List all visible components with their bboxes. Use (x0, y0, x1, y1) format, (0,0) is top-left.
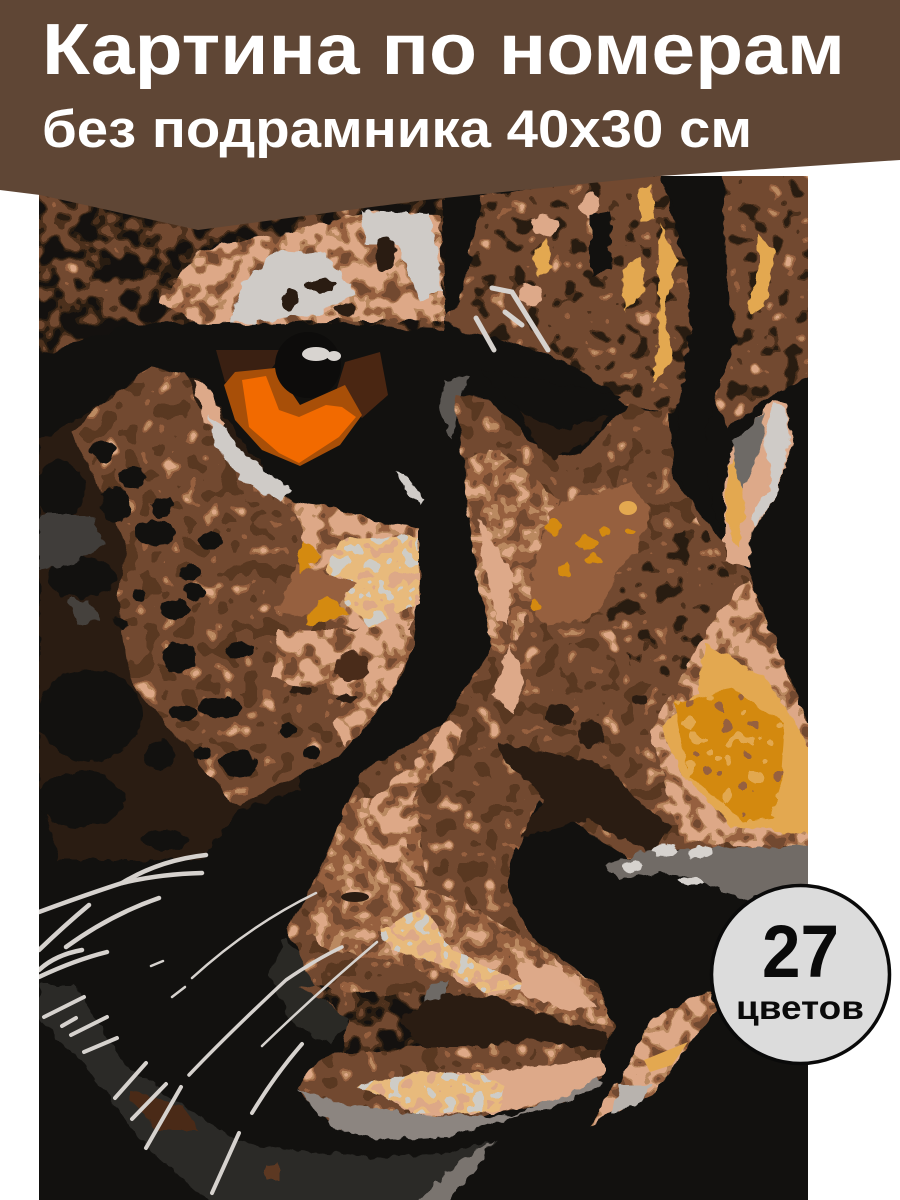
ear-like tuft: pale grey (750, 403, 790, 527)
forehead dark flecks (282, 237, 395, 316)
light gold muzzle patch (661, 643, 830, 837)
bridge gold specks (529, 517, 635, 611)
bridge lower dark flecks (546, 694, 648, 749)
right lip grey (612, 1085, 650, 1112)
peach upper cheek patch (279, 497, 419, 640)
muzzle-side dim grey (270, 940, 350, 1045)
dark shade near nostril (497, 743, 671, 853)
tan bridge area (463, 450, 560, 645)
right forehead fur (444, 170, 695, 412)
far right fur band (714, 176, 808, 428)
cheek dark patch (292, 652, 369, 702)
whisker-pad dark fleck (341, 892, 369, 902)
right lip gold (644, 1042, 688, 1072)
forehead peach flecks (518, 193, 600, 305)
mouth mottled dark (300, 985, 437, 1053)
eye: dark right iris (335, 352, 388, 418)
white forehead marks (476, 288, 548, 350)
header banner (0, 0, 900, 230)
nose top peach strip (360, 720, 463, 860)
speckled muzzle fur (600, 520, 735, 700)
eye: deep orange iris (224, 368, 362, 466)
painting: leopard face (20, 170, 830, 1200)
forehead dark eye spot (590, 212, 612, 275)
title: Картина по номерам (42, 10, 845, 90)
dark brow shade over bridge (614, 395, 621, 400)
ear-like tuft: peach (725, 400, 792, 567)
peach muzzle strip (650, 580, 830, 850)
deep gold muzzle patch (675, 690, 785, 820)
bridge of nose brown base (430, 395, 830, 860)
left cheek dark surround (39, 367, 300, 860)
ear-like tuft: gold strip (726, 455, 745, 550)
dim rust fur (129, 1090, 199, 1130)
grey band above nostril (607, 845, 830, 900)
lower lip light gold (357, 1073, 505, 1113)
white of eye: grey strip (208, 415, 292, 500)
left cheek grey fleck (68, 600, 100, 625)
ear-like tuft: dark grey (733, 413, 765, 488)
pale gold and grey highlight (325, 535, 419, 628)
peach bridge column (493, 643, 524, 717)
grey mouth fleck (425, 980, 450, 1003)
peach lower cheek patch (272, 630, 412, 747)
lower lip peach (380, 1057, 603, 1113)
left forehead fur (39, 194, 446, 354)
mouth dark line (400, 993, 608, 1050)
nose tan mid-band (300, 880, 613, 1027)
lower lip grey edge (297, 1077, 603, 1140)
lower-left dim fur band (39, 985, 345, 1200)
eye: pupil (275, 350, 293, 394)
nose gold band (380, 907, 533, 993)
badge number: 27 (762, 910, 839, 993)
white marks by eye corner (395, 470, 425, 507)
left cheek grey fur (39, 515, 105, 570)
cheek gold accents (296, 540, 349, 627)
grey eye-corner edge (440, 375, 470, 440)
black vertical stripe (675, 222, 698, 403)
dim brown fur (266, 1157, 316, 1180)
far right gold streak (748, 233, 775, 315)
dark brown brow edge (520, 412, 610, 458)
subtitle: без подрамника 40х30 см (42, 100, 752, 159)
rust cheek area (279, 563, 356, 617)
bridge pale gold speck (619, 501, 637, 515)
black forehead stripe (442, 199, 446, 282)
right forehead gold streaks (533, 182, 677, 382)
badge label: цветов (736, 989, 864, 1026)
left black blobs (36, 460, 187, 850)
cheek black spots (90, 439, 319, 777)
nose upper-left tan (318, 785, 425, 895)
whiskers (39, 855, 377, 1193)
grey forehead highlights (230, 210, 442, 323)
chin dim band (280, 1140, 497, 1200)
rust bridge centre (530, 483, 650, 625)
eye: dark upper lid (216, 350, 285, 382)
nose peach end (520, 963, 597, 1010)
white flecks on band (622, 844, 712, 884)
peach bridge strip (478, 520, 513, 623)
eye: orange iris (242, 376, 356, 463)
peach forehead patch (161, 213, 445, 325)
white of eye: peach strip (194, 380, 225, 428)
left cheek brown fur (72, 367, 415, 807)
chin grey arc (413, 1140, 493, 1200)
colour count badge (712, 886, 890, 1064)
nose brown base (287, 720, 615, 1137)
eye: glints (302, 347, 341, 361)
right lip piece (590, 990, 716, 1125)
